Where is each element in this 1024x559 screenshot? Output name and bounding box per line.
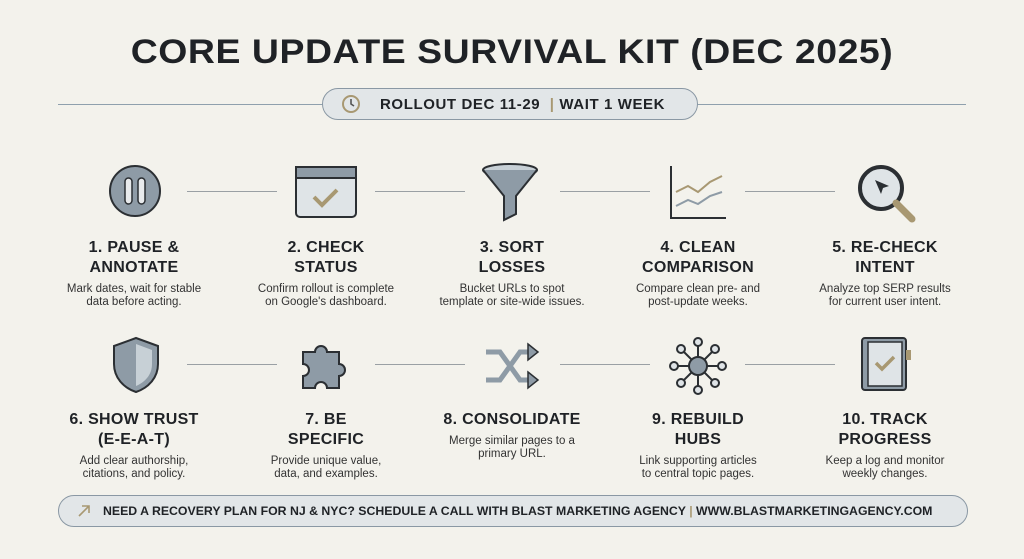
step 10: Keep a log and monitor xyxy=(826,455,944,467)
icon: arrow xyxy=(78,505,90,516)
step 6: citations, and policy. xyxy=(83,468,185,480)
step 6: 6. SHOW TRUST xyxy=(69,411,199,428)
icon: shuffle xyxy=(486,342,540,390)
step 3: Bucket URLs to spot xyxy=(460,283,564,295)
step 10: PROGRESS xyxy=(838,431,932,448)
icon: puzzle xyxy=(302,345,346,389)
step 1: ANNOTATE xyxy=(90,259,178,276)
step 4 xyxy=(636,239,760,308)
step 2: Confirm rollout is complete xyxy=(258,283,394,295)
icon: clock xyxy=(342,95,360,113)
step 4: post-update weeks. xyxy=(648,296,748,308)
step 5: for current user intent. xyxy=(829,296,941,308)
title: CORE UPDATE SURVIVAL KIT (DEC 2025) xyxy=(131,33,893,71)
step 9: to central topic pages. xyxy=(642,468,754,480)
icon: funnel xyxy=(482,163,538,222)
icon: magnifier xyxy=(858,165,916,222)
step 4: 4. CLEAN xyxy=(660,239,736,256)
step 1: data before acting. xyxy=(86,296,182,308)
step 1: 1. PAUSE & xyxy=(89,239,179,256)
icon: notebook xyxy=(861,337,911,391)
step 5: Analyze top SERP results xyxy=(819,283,951,295)
step 10: weekly changes. xyxy=(842,468,928,480)
step 3: LOSSES xyxy=(479,259,545,276)
step 7: SPECIFIC xyxy=(288,431,364,448)
step 5: 5. RE-CHECK xyxy=(832,239,938,256)
step 9 xyxy=(639,411,757,480)
icon: hub xyxy=(669,337,727,395)
step 8 xyxy=(443,411,581,460)
icon: browser check xyxy=(295,166,357,218)
footer banner: NEED A RECOVERY PLAN FOR NJ & NYC? SCHEDULE A CALL WITH BLAST MARKETING AGENCY | WWW.BLASTMARKETINGAGENCY.COM xyxy=(103,504,932,518)
step 5: INTENT xyxy=(855,259,915,276)
step 9: Link supporting articles xyxy=(639,455,757,467)
step 10 xyxy=(826,411,944,480)
footer banner xyxy=(58,495,968,527)
step 7 xyxy=(271,411,381,480)
step 7: data, and examples. xyxy=(274,468,378,480)
step 4: Compare clean pre- and xyxy=(636,283,760,295)
icon: chart xyxy=(670,166,726,219)
step 6: (E-E-A-T) xyxy=(98,431,170,448)
step 8: Merge similar pages to a xyxy=(449,435,575,447)
step 7: Provide unique value, xyxy=(271,455,381,467)
step 2 xyxy=(258,239,394,308)
step 6 xyxy=(69,411,199,480)
icon: shield xyxy=(113,336,159,393)
step 2: 2. CHECK xyxy=(287,239,365,256)
step 4: COMPARISON xyxy=(642,259,754,276)
step 2: on Google's dashboard. xyxy=(265,296,387,308)
step 8: 8. CONSOLIDATE xyxy=(443,411,581,428)
step 6: Add clear authorship, xyxy=(80,455,188,467)
step 9: 9. REBUILD xyxy=(652,411,744,428)
step 8: primary URL. xyxy=(478,448,546,460)
step 3 xyxy=(439,239,585,308)
step 9: HUBS xyxy=(675,431,721,448)
subtitle pill xyxy=(322,88,698,120)
step 5 xyxy=(819,239,951,308)
step 7: 7. BE xyxy=(305,411,347,428)
step 10: 10. TRACK xyxy=(842,411,928,428)
step 1: Mark dates, wait for stable xyxy=(67,283,201,295)
connectors xyxy=(187,191,277,192)
step 2: STATUS xyxy=(294,259,358,276)
subtitle pill: ROLLOUT DEC 11-29 | WAIT 1 WEEK xyxy=(380,96,665,113)
step 1 xyxy=(67,239,201,308)
step 3: template or site-wide issues. xyxy=(439,296,585,308)
step 3: 3. SORT xyxy=(480,239,544,256)
icon: pause xyxy=(109,165,161,217)
